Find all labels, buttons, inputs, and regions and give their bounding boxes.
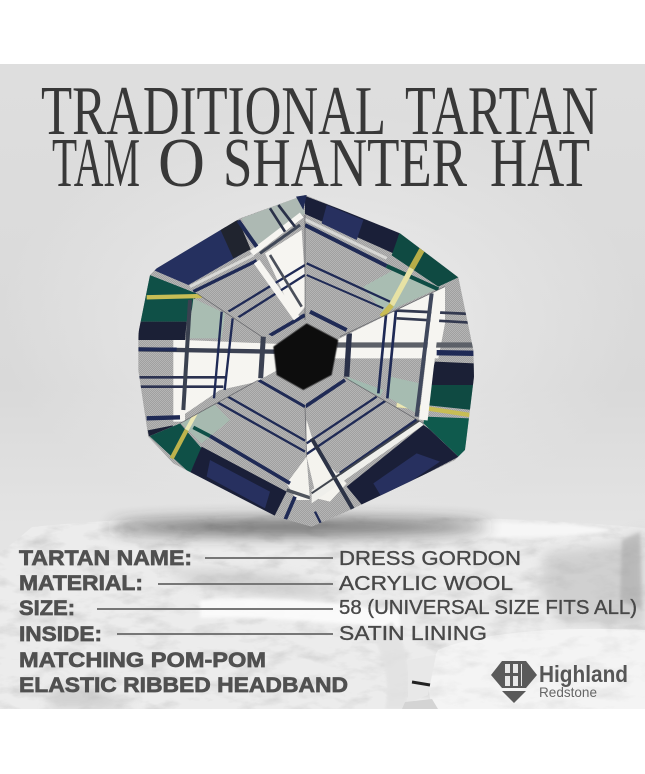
hat shadow [110, 520, 490, 534]
row: tartan name: DRESS GORDON [339, 548, 521, 570]
panel: upper left [150, 195, 305, 341]
row: tartan name: TARTAN NAME: [19, 546, 192, 570]
icon: diamond mark [491, 661, 537, 703]
panel: lower left [148, 372, 312, 526]
icon: top fold [296, 195, 307, 210]
title: HAT [490, 125, 590, 202]
row: inside [19, 622, 487, 646]
panel: right white [332, 278, 474, 456]
logo: Highland Redstone: Highland [539, 661, 628, 687]
seams [180, 215, 445, 457]
feature: matching pom-pom: MATCHING POM-POM [19, 648, 266, 672]
central backdrop glow [0, 110, 640, 530]
row: size: SIZE: [19, 596, 75, 620]
spec rows [19, 546, 637, 697]
row: inside: SATIN LINING [339, 623, 487, 645]
hat: tartan tam o shanter [135, 190, 477, 530]
panel: lower right [306, 371, 458, 526]
row: material: ACRYLIC WOOL [339, 573, 513, 595]
pom-pom [273, 323, 338, 390]
row: tartan name [19, 546, 521, 570]
title: O [158, 125, 205, 202]
panel: upper right [305, 196, 458, 340]
title: SHANTER [223, 125, 467, 202]
title [41, 73, 598, 202]
panel: left white [138, 275, 280, 436]
row: size [19, 596, 637, 620]
logo: Highland Redstone [491, 661, 628, 703]
title: TAM [52, 125, 140, 202]
rock plinth [0, 515, 645, 709]
row: material: MATERIAL: [19, 571, 143, 595]
row: size: 58 (UNIVERSAL SIZE FITS ALL) [339, 597, 637, 619]
logo: Highland Redstone: Redstone [539, 684, 597, 700]
title: TRADITIONAL [41, 73, 386, 150]
feature: elastic ribbed headband: ELASTIC RIBBED HEADBAND [19, 673, 348, 697]
row: inside: INSIDE: [19, 622, 102, 646]
row: material [19, 571, 513, 595]
